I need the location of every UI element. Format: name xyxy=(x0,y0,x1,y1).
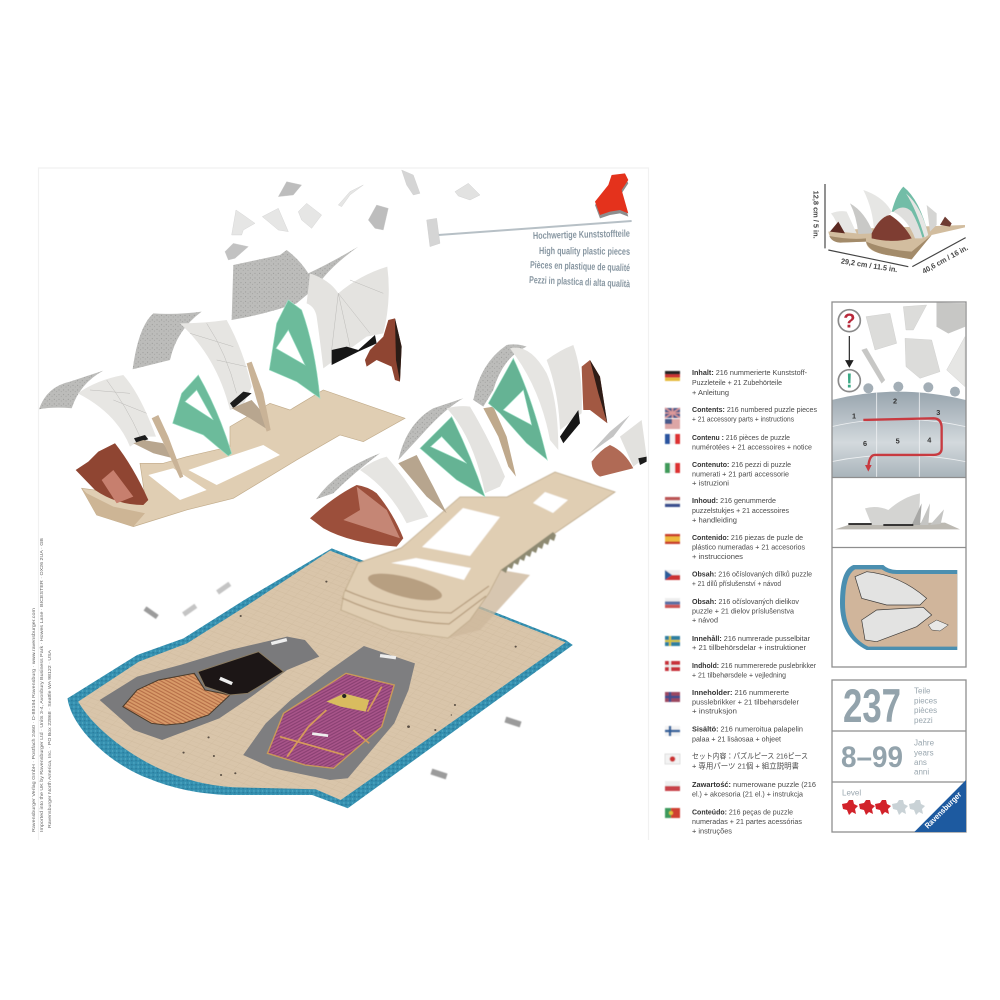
dimension labels: 40,6 cm / 16 in. xyxy=(921,243,970,276)
contents: Polish: Zawartość: numerowane puzzle (216 xyxy=(692,780,816,789)
icon: exclamation mark: ! xyxy=(846,371,853,393)
loose puzzle pieces xyxy=(225,170,420,260)
dimension labels: 29,2 cm / 11.5 in. xyxy=(840,256,898,274)
podium assembly, right xyxy=(341,472,615,638)
piece count: 237 xyxy=(843,679,901,732)
contents: French: numérotées + 21 accessoires + notice xyxy=(692,442,812,451)
right theatre pad xyxy=(243,646,415,780)
deck xyxy=(78,551,566,800)
left theatre stage xyxy=(198,652,284,695)
contents: Danish xyxy=(692,661,816,680)
contents: Polish: el.) + akcesoria (21 el.) + instrukcja xyxy=(692,789,804,798)
flag: Poland xyxy=(665,781,680,791)
contents: Japanese: + 専用パーツ 21個 + 組立説明書 xyxy=(692,761,799,771)
age labels: Jahre xyxy=(914,738,935,748)
flag: Portugal xyxy=(665,808,680,818)
leader line xyxy=(438,221,632,235)
quality caption: Pièces en plastique de qualité xyxy=(530,260,631,274)
dimension labels xyxy=(811,191,970,276)
finished model with dimensions xyxy=(811,184,970,276)
flag: Japan xyxy=(665,754,680,764)
flag: Denmark xyxy=(665,661,680,671)
imprint text xyxy=(31,538,52,832)
step numbers xyxy=(852,396,940,448)
level rating xyxy=(842,788,925,815)
brown wing A xyxy=(310,485,403,547)
age range: 8–99 xyxy=(841,741,903,774)
imprint text: Imported into the UK by Ravensburger Ltd · Units 3-4, Avonbury Business Park · Howes Lane · BICESTER · OX26 2UA · GB xyxy=(39,538,44,832)
age labels: years xyxy=(914,748,934,758)
contents: Slovak: Obsah: 216 očíslovaných dielikov xyxy=(692,597,799,606)
flag: Netherlands xyxy=(665,497,680,507)
contents: Norwegian xyxy=(692,688,799,716)
flag: France xyxy=(665,434,680,444)
contents: Italian xyxy=(692,460,791,488)
contents: Dutch xyxy=(692,496,789,525)
contents: Swedish xyxy=(692,634,810,652)
contents: Italian: Contenuto: 216 pezzi di puzzle xyxy=(692,460,791,469)
podium plate xyxy=(341,472,615,638)
dimension labels: 12,8 cm / 5 in. xyxy=(811,191,820,239)
big grey shell xyxy=(232,247,358,320)
multilingual contents list xyxy=(692,368,817,835)
small shell group E xyxy=(590,415,647,477)
step numbers: 3 xyxy=(936,408,940,417)
arrow xyxy=(846,336,853,367)
contents: Swedish: Innehåll: 216 numrerade pusselbitar xyxy=(692,634,810,643)
brown wing D xyxy=(582,360,607,423)
shell white C xyxy=(510,348,558,450)
contents: German: + Anleitung xyxy=(692,388,729,397)
flag: Spain xyxy=(665,534,680,544)
piece count labels: Teile xyxy=(914,686,931,696)
contents: English: + 21 accessory parts + instructions xyxy=(692,414,794,423)
age labels xyxy=(914,738,935,776)
panel: top view xyxy=(840,565,957,650)
shell far left grey xyxy=(39,371,103,409)
flag: Sweden xyxy=(665,636,680,646)
contents: Norwegian: pusslebrikker + 21 tilbehørsdeler xyxy=(692,697,799,706)
contents: Italian: numerati + 21 parti accessorie xyxy=(692,469,789,478)
contents: Finnish xyxy=(692,725,803,743)
flags column xyxy=(665,371,680,818)
contents: Norwegian: + instruksjon xyxy=(692,707,737,716)
upper left exploded assembly xyxy=(39,170,420,527)
contents: Slovak: + návod xyxy=(692,616,718,625)
contents: Italian: + istruzioni xyxy=(692,479,729,488)
main illustration panel frame xyxy=(38,168,648,840)
grey curved wall with jigsaw tabs xyxy=(832,382,966,477)
contents: German: Inhalt: 216 nummerierte Kunststoff- xyxy=(692,368,807,377)
brown wing 1 xyxy=(76,443,148,505)
shell 1 white xyxy=(78,375,156,447)
contents: Danish: Indhold: 216 nummererede puslebrikker xyxy=(692,661,816,670)
Ravensburger logo corner: Ravensburger xyxy=(923,790,963,830)
step numbers: 1 xyxy=(852,411,856,420)
dimension lines xyxy=(825,184,966,267)
imprint text: Ravensburger North America, Inc. · PO Box 22868 · Seattle WA 98122 · USA xyxy=(47,650,52,828)
contents: Japanese: セット内容：パズルピース 216ピース xyxy=(692,751,808,761)
panel: puzzle instruction xyxy=(832,302,966,477)
piece count labels: pezzi xyxy=(914,716,933,725)
flag: USA xyxy=(665,419,680,429)
icon: question mark: ? xyxy=(843,311,855,333)
age range xyxy=(841,738,935,776)
shell grey C xyxy=(473,344,527,407)
flag: Norway xyxy=(665,692,680,702)
quality caption: High quality plastic pieces xyxy=(539,246,630,258)
level rating: Level xyxy=(842,788,861,798)
shell white B xyxy=(447,406,505,493)
right exploded assembly shells xyxy=(310,173,647,547)
contents: Polish xyxy=(692,780,816,798)
right theatre seating xyxy=(267,673,394,768)
brown wing 3 xyxy=(365,318,402,382)
contents: Dutch: puzzelstukjes + 21 accessoires xyxy=(692,506,789,515)
contents: Czech: + 21 dílů příslušenství + návod xyxy=(692,579,781,588)
shell 2 white xyxy=(180,320,252,410)
contents: Portuguese: Conteúdo: 216 peças de puzzle xyxy=(692,808,793,817)
icon: level pieces xyxy=(842,800,925,815)
base platform with water and theatres xyxy=(67,548,573,808)
podium teeth xyxy=(501,532,556,573)
step numbers: 2 xyxy=(893,396,897,405)
podium seat oval xyxy=(366,568,444,606)
shell white D xyxy=(547,345,582,430)
contents: French xyxy=(692,433,812,451)
imprint text: Ravensburger Verlag GmbH · Postfach 2460 · D-88194 Ravensburg · www.ravensburger.com xyxy=(31,607,36,832)
plate openings xyxy=(422,508,500,556)
contents: Norwegian: Inneholder: 216 nummererte xyxy=(692,688,789,697)
contents: German xyxy=(692,368,807,397)
step numbers: 4 xyxy=(927,436,932,445)
age labels: ans xyxy=(914,758,927,767)
left theatre seating xyxy=(123,673,230,725)
panel: silhouette side view xyxy=(835,493,960,529)
rib 1 xyxy=(133,440,173,458)
contents: Portuguese: numeradas + 21 partes acessórias xyxy=(692,817,802,826)
rib tan A xyxy=(398,455,447,513)
contents: Spanish: Contenido: 216 piezas de puzle de xyxy=(692,533,803,542)
loose pieces right xyxy=(427,183,480,247)
flag: Czech Republic xyxy=(665,570,680,580)
contents: Portuguese: + instruções xyxy=(692,826,732,835)
contents: French: Contenu : 216 pièces de puzzle xyxy=(692,433,790,442)
icon: question mark xyxy=(838,310,860,333)
contents: Spanish: + instrucciones xyxy=(692,552,743,561)
contents: Slovak xyxy=(692,597,799,625)
green rib C xyxy=(488,358,547,460)
contents: Portuguese xyxy=(692,808,802,835)
shell grey A xyxy=(316,453,380,499)
icon: red plastic puzzle piece xyxy=(595,173,628,218)
flag: Slovakia xyxy=(665,598,680,608)
shell grey B xyxy=(398,398,463,460)
quality caption: Pezzi in plastica di alta qualità xyxy=(529,275,631,290)
deck peg specks xyxy=(182,581,517,776)
podium shadow xyxy=(448,570,530,638)
shell white A xyxy=(360,457,428,523)
green rib 1 xyxy=(173,375,232,456)
Ravensburger logo corner xyxy=(914,780,966,832)
contents: Finnish: palaa + 21 lisäosaa + ohjeet xyxy=(692,734,782,743)
contents: English: Contents: 216 numbered puzzle pieces xyxy=(692,405,817,414)
contents: Dutch: + handleiding xyxy=(692,516,737,525)
model render xyxy=(828,187,965,259)
contents: Danish: + 21 tilbehørsdele + vejledning xyxy=(692,671,786,680)
contents: Spanish xyxy=(692,533,805,561)
step numbers: 5 xyxy=(896,436,900,445)
age labels: anni xyxy=(914,768,929,776)
contents: Slovak: puzzle + 21 dielov príslušenstva xyxy=(692,607,795,616)
panel frames xyxy=(832,302,966,832)
plate left xyxy=(82,390,405,527)
green rib B xyxy=(420,417,485,497)
right theatre stage xyxy=(326,693,369,712)
flag: Germany xyxy=(665,371,680,381)
flag: Italy xyxy=(665,463,680,473)
left theatre pad xyxy=(100,637,319,740)
red assembly path xyxy=(863,418,942,467)
flag: UK xyxy=(665,408,680,418)
icon: exclamation mark xyxy=(838,370,860,393)
flag: Finland xyxy=(665,726,680,736)
contents: Japanese xyxy=(692,751,808,771)
quality caption xyxy=(529,229,631,290)
shell 2 grey xyxy=(133,312,202,369)
rib 2 xyxy=(232,400,268,430)
contents: Spanish: plástico numeradas + 21 accesorios xyxy=(692,542,805,551)
contents: German: Puzzleteile + 21 Zubehörteile xyxy=(692,378,782,387)
contents: English xyxy=(692,405,817,423)
contents: Swedish: + 21 tillbehörsdelar + instruktioner xyxy=(692,643,806,652)
piece count labels xyxy=(914,686,937,725)
step numbers: 6 xyxy=(863,439,867,448)
loose instruction pieces xyxy=(862,303,965,387)
contents: Czech: Obsah: 216 očíslovaných dílků puzzle xyxy=(692,569,812,578)
contents: Dutch: Inhoud: 216 genummerde xyxy=(692,496,776,505)
piece count labels: pièces xyxy=(914,706,937,715)
contents: Finnish: Sisältö: 216 numeroitua palapelin xyxy=(692,725,803,734)
rib tan B xyxy=(483,407,516,477)
shell 3 white xyxy=(307,267,389,368)
quality caption: Hochwertige Kunststoffteile xyxy=(533,229,630,242)
contents: Czech xyxy=(692,569,812,588)
water edge xyxy=(67,548,573,808)
loose connector parts xyxy=(144,582,522,779)
piece count labels: pieces xyxy=(914,696,937,706)
green rib 2 xyxy=(269,300,320,398)
